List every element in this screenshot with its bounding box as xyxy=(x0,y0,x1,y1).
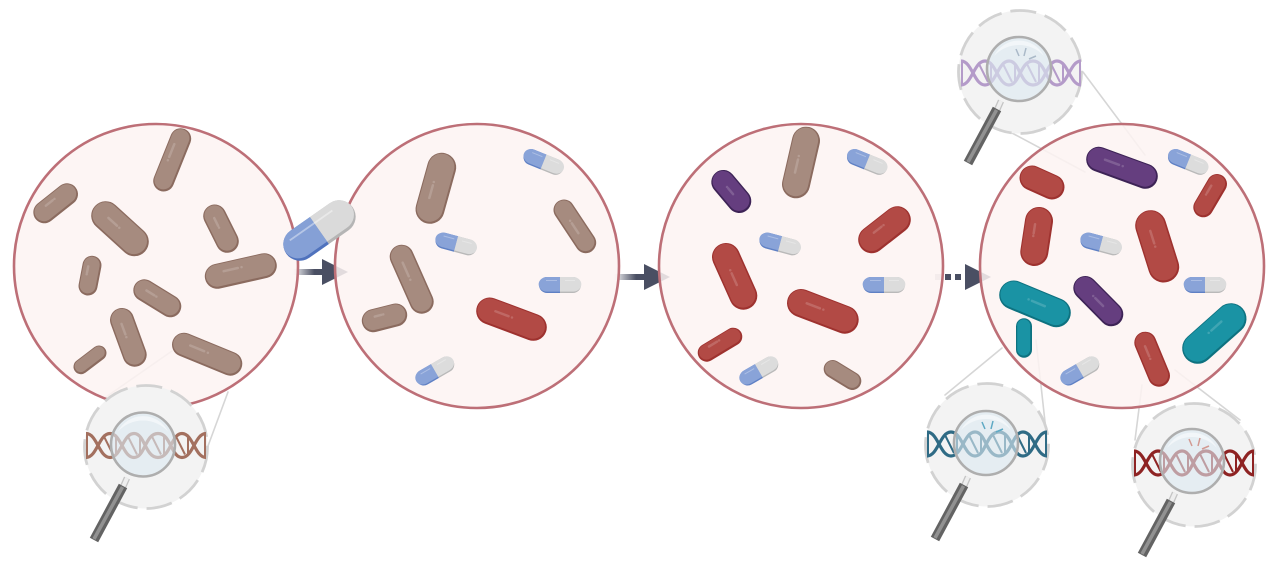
icon: magnifier over red DNA xyxy=(1132,404,1256,555)
bacterium xyxy=(181,342,230,364)
icon: large antibiotic capsule xyxy=(277,194,362,267)
red bacterium xyxy=(1200,181,1217,207)
red bacterium xyxy=(798,300,845,320)
bacterium xyxy=(561,207,586,243)
bacterium xyxy=(119,317,135,355)
pill xyxy=(413,353,457,389)
bacterium xyxy=(161,136,181,181)
bacterium xyxy=(41,191,67,212)
pill xyxy=(1184,277,1226,293)
bacterium xyxy=(214,263,264,276)
bacterium xyxy=(793,138,806,184)
purple bacterium xyxy=(1096,156,1145,176)
arrow: step 2 to step 3 xyxy=(613,264,670,290)
red bacterium xyxy=(723,254,743,296)
teal bacterium xyxy=(1011,292,1056,313)
bacterium xyxy=(399,254,422,302)
callout lines: teal magnifier xyxy=(945,340,1047,440)
red bacterium xyxy=(1142,340,1159,376)
panel: diversified resistant population xyxy=(980,124,1264,408)
mutation marks xyxy=(1016,48,1036,59)
panel: antibiotic exposure xyxy=(335,124,619,408)
mutation marks xyxy=(1189,438,1209,449)
mutation marks xyxy=(982,421,1003,432)
bacterium xyxy=(85,262,92,286)
pill xyxy=(1165,147,1211,177)
red bacterium xyxy=(869,217,897,240)
small teal bacterium xyxy=(1016,326,1032,350)
purple bacterium xyxy=(1082,285,1111,314)
arrow: step 1 to step 2 xyxy=(292,259,348,285)
bacterium xyxy=(212,213,227,241)
bacterium xyxy=(427,164,442,209)
icon: magnifier over teal DNA xyxy=(926,384,1048,539)
icon: magnifier over brown DNA xyxy=(84,386,208,540)
red bacterium xyxy=(704,334,733,353)
pill xyxy=(539,277,581,293)
teal bacterium xyxy=(1195,316,1231,348)
callout lines: top magnifier xyxy=(1012,72,1145,172)
red bacterium xyxy=(1031,218,1039,252)
pill xyxy=(844,147,890,177)
pill xyxy=(433,231,479,257)
callout lines: magnifier 1 xyxy=(106,351,228,446)
pill xyxy=(1058,353,1102,389)
resistant bacterium xyxy=(487,308,533,327)
bacterium xyxy=(832,368,852,381)
pill xyxy=(757,231,803,257)
pill xyxy=(1078,231,1124,257)
panel: initial bacterial population xyxy=(14,124,298,408)
purple bacterium xyxy=(720,179,739,201)
bacterium xyxy=(81,352,99,367)
callout lines: red magnifier xyxy=(1135,370,1240,440)
pill xyxy=(863,277,905,293)
red bacterium xyxy=(1148,223,1164,267)
bacterium xyxy=(141,287,170,306)
pill xyxy=(521,147,566,177)
panel: selection of resistant bacteria xyxy=(659,124,943,408)
icon: magnifier over purple DNA xyxy=(958,10,1082,163)
bacterium xyxy=(103,213,134,242)
red bacterium xyxy=(1032,177,1052,187)
pill xyxy=(737,353,781,389)
arrow: step 3 to step 4 (dotted) xyxy=(935,264,991,290)
bacterium xyxy=(370,312,396,321)
